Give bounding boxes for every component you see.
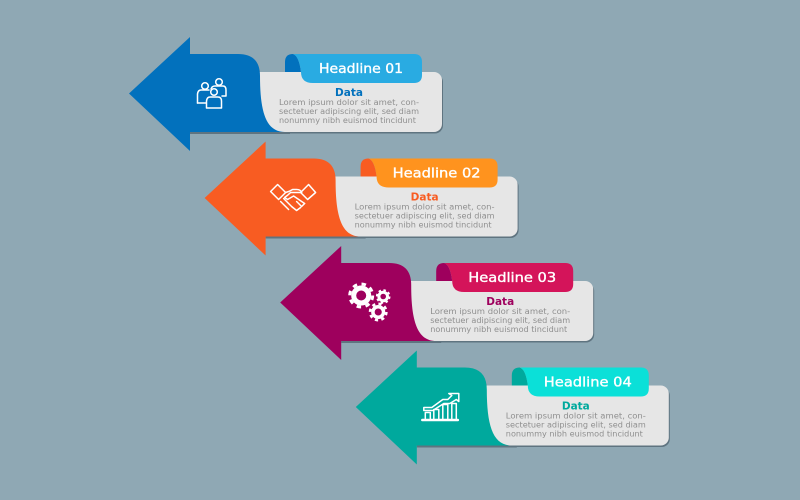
body text: nonummy nibh euismod tincidunt <box>506 430 643 438</box>
icon: gears <box>350 284 390 320</box>
panel: step 02 <box>205 142 519 256</box>
data label: Data <box>335 87 363 99</box>
tab fold <box>285 54 301 72</box>
body text <box>279 98 419 125</box>
tab <box>369 158 498 188</box>
body text: sectetuer adipiscing elit, sed diam <box>355 212 495 220</box>
arrow shadow <box>266 236 366 238</box>
body text: Lorem ipsum dolor sit amet, con- <box>506 412 646 420</box>
data label: Data <box>562 400 590 412</box>
arrow <box>356 350 512 464</box>
data label: Data <box>486 296 514 308</box>
card <box>477 386 669 446</box>
arrow shadow <box>190 132 290 134</box>
body text: sectetuer adipiscing elit, sed diam <box>430 316 570 325</box>
card shadow <box>489 388 670 447</box>
tab <box>444 263 573 292</box>
panel: step 04 <box>356 350 670 464</box>
panel: step 03 <box>280 246 594 360</box>
body text: Lorem ipsum dolor sit amet, con- <box>355 202 495 212</box>
body text: nonummy nibh euismod tincidunt <box>279 116 416 125</box>
body text <box>355 202 495 230</box>
card <box>250 72 442 132</box>
tab fold <box>361 158 377 176</box>
body text <box>506 412 646 438</box>
icon: growth chart <box>422 394 459 420</box>
card <box>401 281 593 341</box>
body text: sectetuer adipiscing elit, sed diam <box>279 107 419 116</box>
body text: nonummy nibh euismod tincidunt <box>355 220 492 230</box>
body text: nonummy nibh euismod tincidunt <box>430 325 567 334</box>
heading: Headline 01 <box>319 62 403 77</box>
body text <box>430 307 570 334</box>
arrow <box>280 246 436 360</box>
heading: Headline 02 <box>393 166 481 182</box>
tab <box>293 54 422 83</box>
tab fold <box>436 263 452 281</box>
arrow <box>129 37 285 151</box>
tab <box>520 368 649 396</box>
icon: handshake <box>271 184 316 210</box>
body text: Lorem ipsum dolor sit amet, con- <box>430 307 570 316</box>
card shadow <box>413 283 594 342</box>
arrow shadow <box>341 341 441 343</box>
card <box>326 176 518 236</box>
data label: Data <box>411 192 439 204</box>
arrow <box>205 142 361 256</box>
body text: sectetuer adipiscing elit, sed diam <box>506 420 646 430</box>
arrow shadow <box>417 446 517 448</box>
body text: Lorem ipsum dolor sit amet, con- <box>279 98 419 107</box>
icon: people <box>198 79 226 108</box>
heading: Headline 04 <box>544 376 632 390</box>
card shadow <box>262 74 443 134</box>
heading: Headline 03 <box>468 271 556 286</box>
tab fold <box>512 368 528 386</box>
card shadow <box>338 178 519 238</box>
panel: step 01 <box>129 37 443 151</box>
